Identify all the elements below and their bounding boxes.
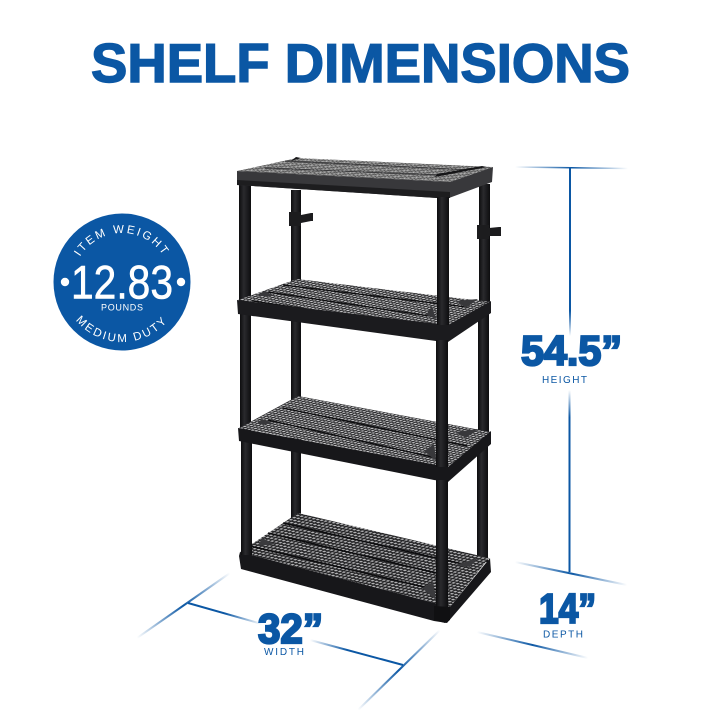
front right leg (436, 197, 449, 612)
front left leg upper (239, 184, 251, 304)
badge number: 12.83: 12.83 (71, 256, 173, 308)
badge label: item weight: ITEM WEIGHT (74, 225, 170, 256)
back legs (291, 184, 490, 562)
width value: 32” (258, 605, 323, 652)
badge: item weight (54, 214, 190, 350)
shelf unit (237, 157, 501, 623)
depth dimension (477, 562, 627, 658)
wall brackets (289, 212, 501, 239)
depth label: DEPTH (543, 630, 583, 640)
title: SHELF DIMENSIONS (91, 33, 630, 94)
third shelf (238, 396, 491, 482)
bottom corner foot (434, 606, 450, 623)
depth value: 14” (539, 585, 596, 632)
width dimension (137, 573, 440, 710)
bottom shelf (239, 513, 491, 623)
badge label: medium duty: MEDIUM DUTY (76, 315, 164, 342)
badge dots (61, 278, 185, 286)
height dimension (515, 167, 628, 572)
height value: 54.5” (521, 327, 622, 374)
front left leg lower (241, 440, 252, 555)
top shelf (237, 157, 493, 198)
badge unit: pounds: POUNDS (101, 302, 143, 312)
second shelf (237, 279, 491, 342)
front left leg middle (240, 312, 251, 432)
width label: WIDTH (264, 647, 304, 658)
height label: HEIGHT (542, 375, 587, 386)
